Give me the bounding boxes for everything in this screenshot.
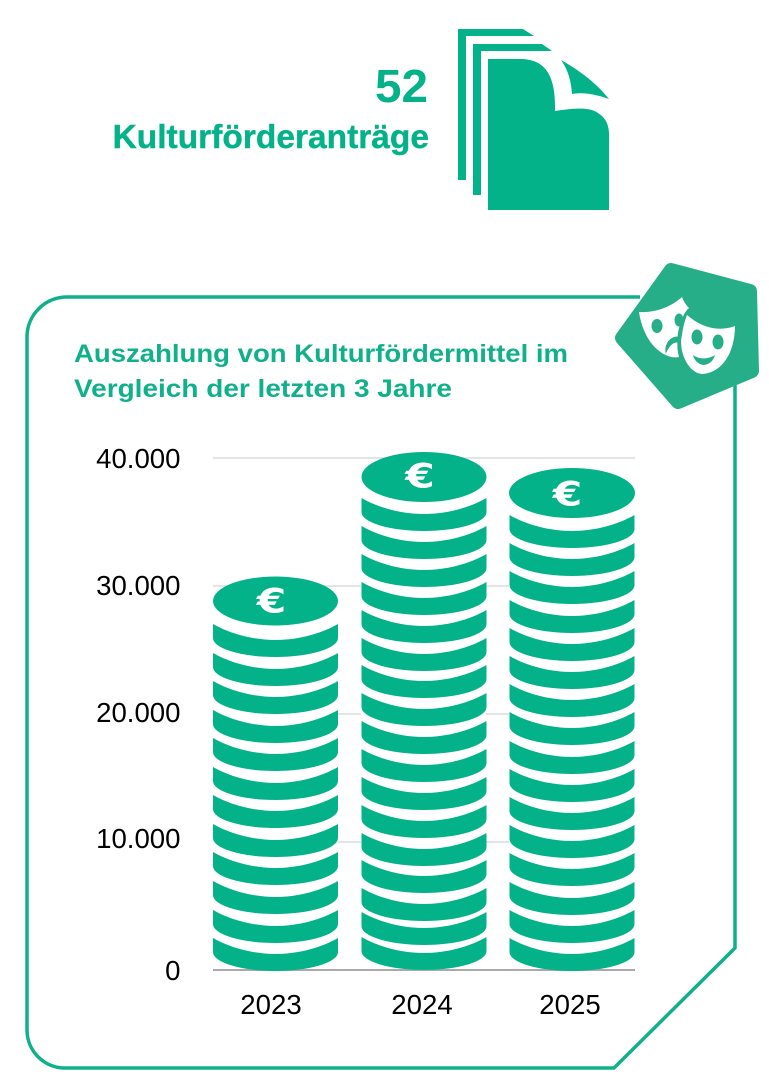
- y axis and grid lines: 40.000: [96, 443, 180, 474]
- coin stack 2023: €: [256, 582, 286, 621]
- y axis and grid lines: [96, 443, 635, 986]
- x axis labels: [240, 989, 601, 1020]
- coin stack 2025: €: [552, 475, 582, 514]
- x axis labels: 2024: [391, 989, 453, 1020]
- badge pentagon: [622, 270, 752, 402]
- x axis labels: 2025: [539, 989, 601, 1020]
- y axis and grid lines: 10.000: [96, 823, 180, 854]
- coin stack 2023: [213, 576, 338, 971]
- statistic: number of applications: [113, 60, 429, 156]
- coin stack 2024: €: [404, 457, 435, 496]
- coin stack 2024: [361, 452, 486, 970]
- happy mask: [681, 315, 735, 374]
- chart heading: Auszahlung von Kulturfördermittel im: [74, 340, 568, 368]
- bar chart: coin stacks: [96, 443, 635, 1020]
- icon: stack of documents: [458, 29, 609, 210]
- panel frame: [27, 297, 735, 1068]
- chart heading: [74, 340, 568, 403]
- label Kulturförderanträge: Kulturförderanträge: [113, 119, 429, 156]
- coin stack 2025: [509, 468, 635, 971]
- y axis and grid lines: 20.000: [96, 697, 180, 728]
- y axis and grid lines: 0: [165, 955, 180, 986]
- icon: theatre masks badge: [622, 270, 752, 402]
- sad mask: [639, 297, 689, 357]
- number 52: 52: [375, 60, 428, 112]
- y axis and grid lines: 30.000: [96, 570, 180, 601]
- x axis labels: 2023: [240, 989, 302, 1020]
- chart heading: Vergleich der letzten 3 Jahre: [74, 375, 452, 403]
